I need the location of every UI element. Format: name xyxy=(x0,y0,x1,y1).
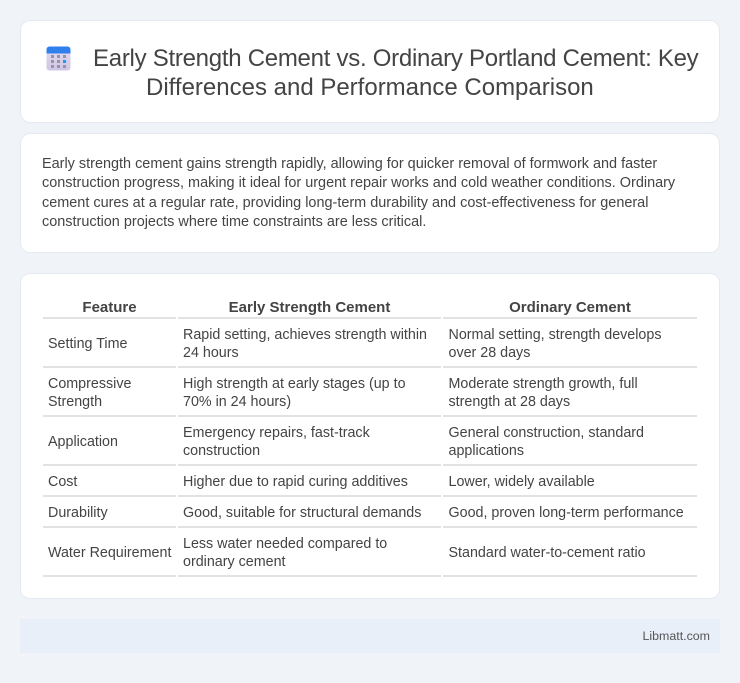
row: compressive strength: Compressive xyxy=(48,376,131,392)
row: compressive strength: High strength at early stages (up to xyxy=(183,376,406,392)
icon: calendar xyxy=(46,46,70,70)
footer text: Libmatt.com xyxy=(643,629,710,643)
row: application: General construction, standard xyxy=(448,425,644,441)
text block: introduction: construction progress, making it ideal for urgent repair works and cold weather conditions. Ordinary xyxy=(42,175,675,191)
text block: introduction: construction projects where time constraints are less critical. xyxy=(42,214,426,230)
panel: comparison table xyxy=(20,273,720,599)
title: Differences and Performance Comparison xyxy=(146,74,594,101)
row: water requirement: Less water needed compared to xyxy=(183,536,387,552)
row: durability xyxy=(48,505,684,521)
row: application xyxy=(48,425,644,459)
row: water requirement xyxy=(48,536,646,570)
row: cost: Lower, widely available xyxy=(448,474,595,490)
row: water requirement: Water Requirement xyxy=(48,545,171,561)
row: application: Application xyxy=(48,434,118,450)
text block: introduction: cement cures at a regular rate, providing long-term durability and cost-effectiveness for general xyxy=(42,195,648,211)
row: application: Emergency repairs, fast-track xyxy=(183,425,370,441)
text block: introduction: Early strength cement gains strength rapidly, allowing for quicker removal of formwork and faster xyxy=(42,156,657,172)
row: setting time: 24 hours xyxy=(183,345,239,361)
row: setting time: over 28 days xyxy=(448,345,530,361)
panel: introduction xyxy=(20,133,720,253)
row: water requirement: Standard water-to-cement ratio xyxy=(448,545,646,561)
row: compressive strength: Moderate strength growth, full xyxy=(448,376,638,392)
row: cost xyxy=(48,474,595,490)
row: compressive strength: 70% in 24 hours) xyxy=(183,394,291,410)
row: durability: Good, suitable for structural demands xyxy=(183,505,421,521)
panel: title card xyxy=(20,20,720,123)
row: setting time xyxy=(48,327,661,361)
row: cost: Higher due to rapid curing additives xyxy=(183,474,408,490)
row: durability: Good, proven long-term performance xyxy=(448,505,684,521)
row: setting time: Setting Time xyxy=(48,336,127,352)
table header: Feature xyxy=(82,299,137,316)
footer bar xyxy=(20,619,720,653)
row: application: construction xyxy=(183,443,260,459)
row: compressive strength xyxy=(48,376,638,410)
row: compressive strength: Strength xyxy=(48,394,102,410)
row: application: applications xyxy=(448,443,524,459)
row: cost: Cost xyxy=(48,474,77,490)
row: setting time: Normal setting, strength develops xyxy=(448,327,661,343)
table header: Early Strength Cement xyxy=(229,299,390,316)
row: durability: Durability xyxy=(48,505,108,521)
table header xyxy=(82,299,631,316)
row: compressive strength: strength at 28 days xyxy=(448,394,570,410)
row: water requirement: ordinary cement xyxy=(183,554,286,570)
table header: Ordinary Cement xyxy=(509,299,631,316)
title: Early Strength Cement vs. Ordinary Portland Cement: Key xyxy=(93,45,698,72)
row: setting time: Rapid setting, achieves strength within xyxy=(183,327,427,343)
text block: introduction xyxy=(42,156,675,230)
title xyxy=(93,45,698,101)
